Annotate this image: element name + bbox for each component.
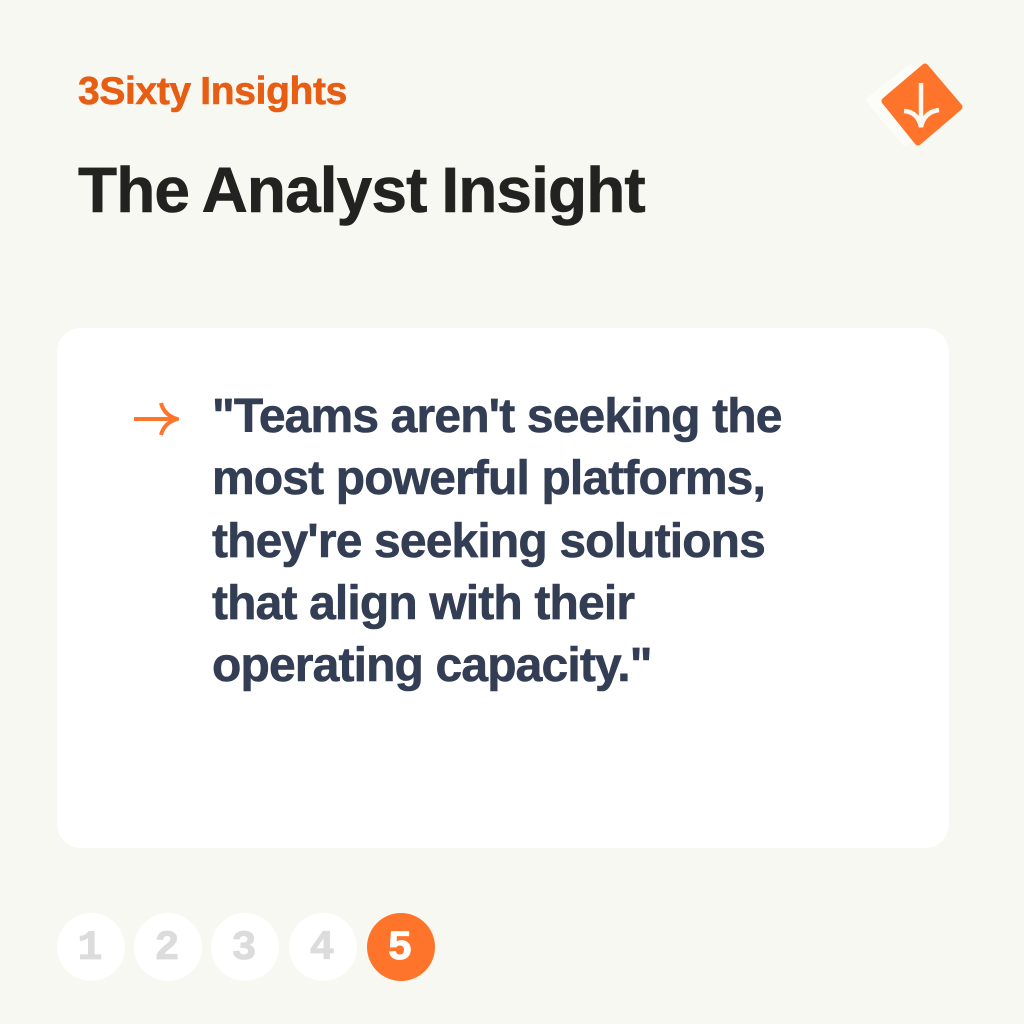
quote text bbox=[212, 390, 782, 692]
brand label: 3Sixty Insights bbox=[78, 70, 347, 113]
quote text: they're seeking solutions bbox=[212, 515, 765, 568]
quote text: operating capacity." bbox=[212, 639, 652, 692]
step 2 bbox=[134, 913, 202, 981]
icon: orange arrow bbox=[134, 402, 179, 436]
step 2: 2 bbox=[154, 924, 180, 972]
step 3 bbox=[211, 913, 279, 981]
step 1 bbox=[57, 913, 125, 981]
step 1: 1 bbox=[77, 924, 103, 972]
step 4: 4 bbox=[309, 924, 335, 972]
pagination steps bbox=[57, 913, 435, 981]
step 5 active: 5 bbox=[387, 924, 413, 972]
panel: quote card bbox=[57, 328, 949, 848]
icon: diamond with down arrow bbox=[882, 64, 962, 146]
title: The Analyst Insight bbox=[78, 154, 645, 226]
step 5 active bbox=[367, 913, 435, 981]
step 3: 3 bbox=[231, 924, 257, 972]
quote text: "Teams aren't seeking the bbox=[212, 390, 782, 443]
step 4 bbox=[289, 913, 357, 981]
quote text: most powerful platforms, bbox=[212, 452, 765, 505]
quote text: that align with their bbox=[212, 577, 634, 630]
